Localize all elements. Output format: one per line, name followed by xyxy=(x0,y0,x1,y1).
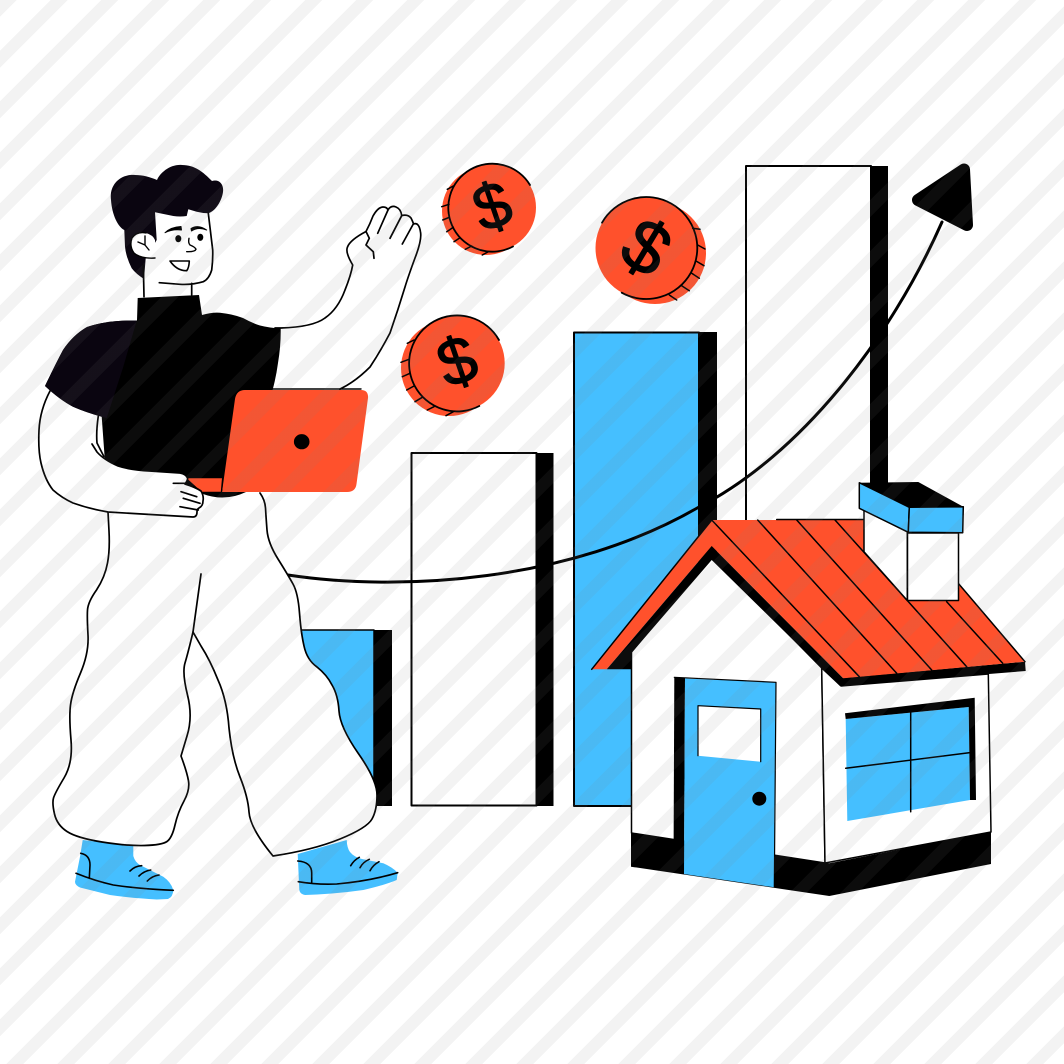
laptop xyxy=(222,389,368,492)
window xyxy=(845,698,976,821)
lower arm and hand xyxy=(39,391,203,517)
right shoe xyxy=(298,840,398,895)
house xyxy=(592,482,1026,896)
ear xyxy=(131,233,155,258)
coin: left xyxy=(401,315,505,416)
growth arrow xyxy=(288,170,967,582)
head xyxy=(111,165,223,298)
hair xyxy=(111,165,223,279)
raised arm xyxy=(270,206,421,395)
door xyxy=(674,677,776,887)
coin: left: $ xyxy=(428,320,486,402)
bar 1 xyxy=(260,630,392,806)
person xyxy=(39,165,421,899)
coin: top: $ xyxy=(464,166,521,246)
shirt xyxy=(45,295,281,498)
chimney xyxy=(864,505,907,600)
nose xyxy=(187,238,196,252)
house plinth xyxy=(631,832,991,896)
coin: top xyxy=(442,164,536,255)
sleeve xyxy=(45,320,137,418)
coin: right: $ xyxy=(607,201,685,293)
bar 3 xyxy=(574,332,717,806)
coin: right xyxy=(596,197,706,304)
eyes and brows xyxy=(165,226,207,242)
face lines xyxy=(143,213,213,297)
bar 2 xyxy=(412,453,554,806)
bar chart xyxy=(260,166,888,806)
bar 4 xyxy=(746,166,888,566)
trousers xyxy=(53,493,377,856)
mouth xyxy=(170,261,189,271)
house walls xyxy=(632,556,991,863)
laptop base xyxy=(187,478,223,492)
chimney body and cap xyxy=(859,482,1003,663)
left shoe xyxy=(75,840,173,900)
neck and face xyxy=(144,212,213,298)
roof xyxy=(592,520,1026,686)
